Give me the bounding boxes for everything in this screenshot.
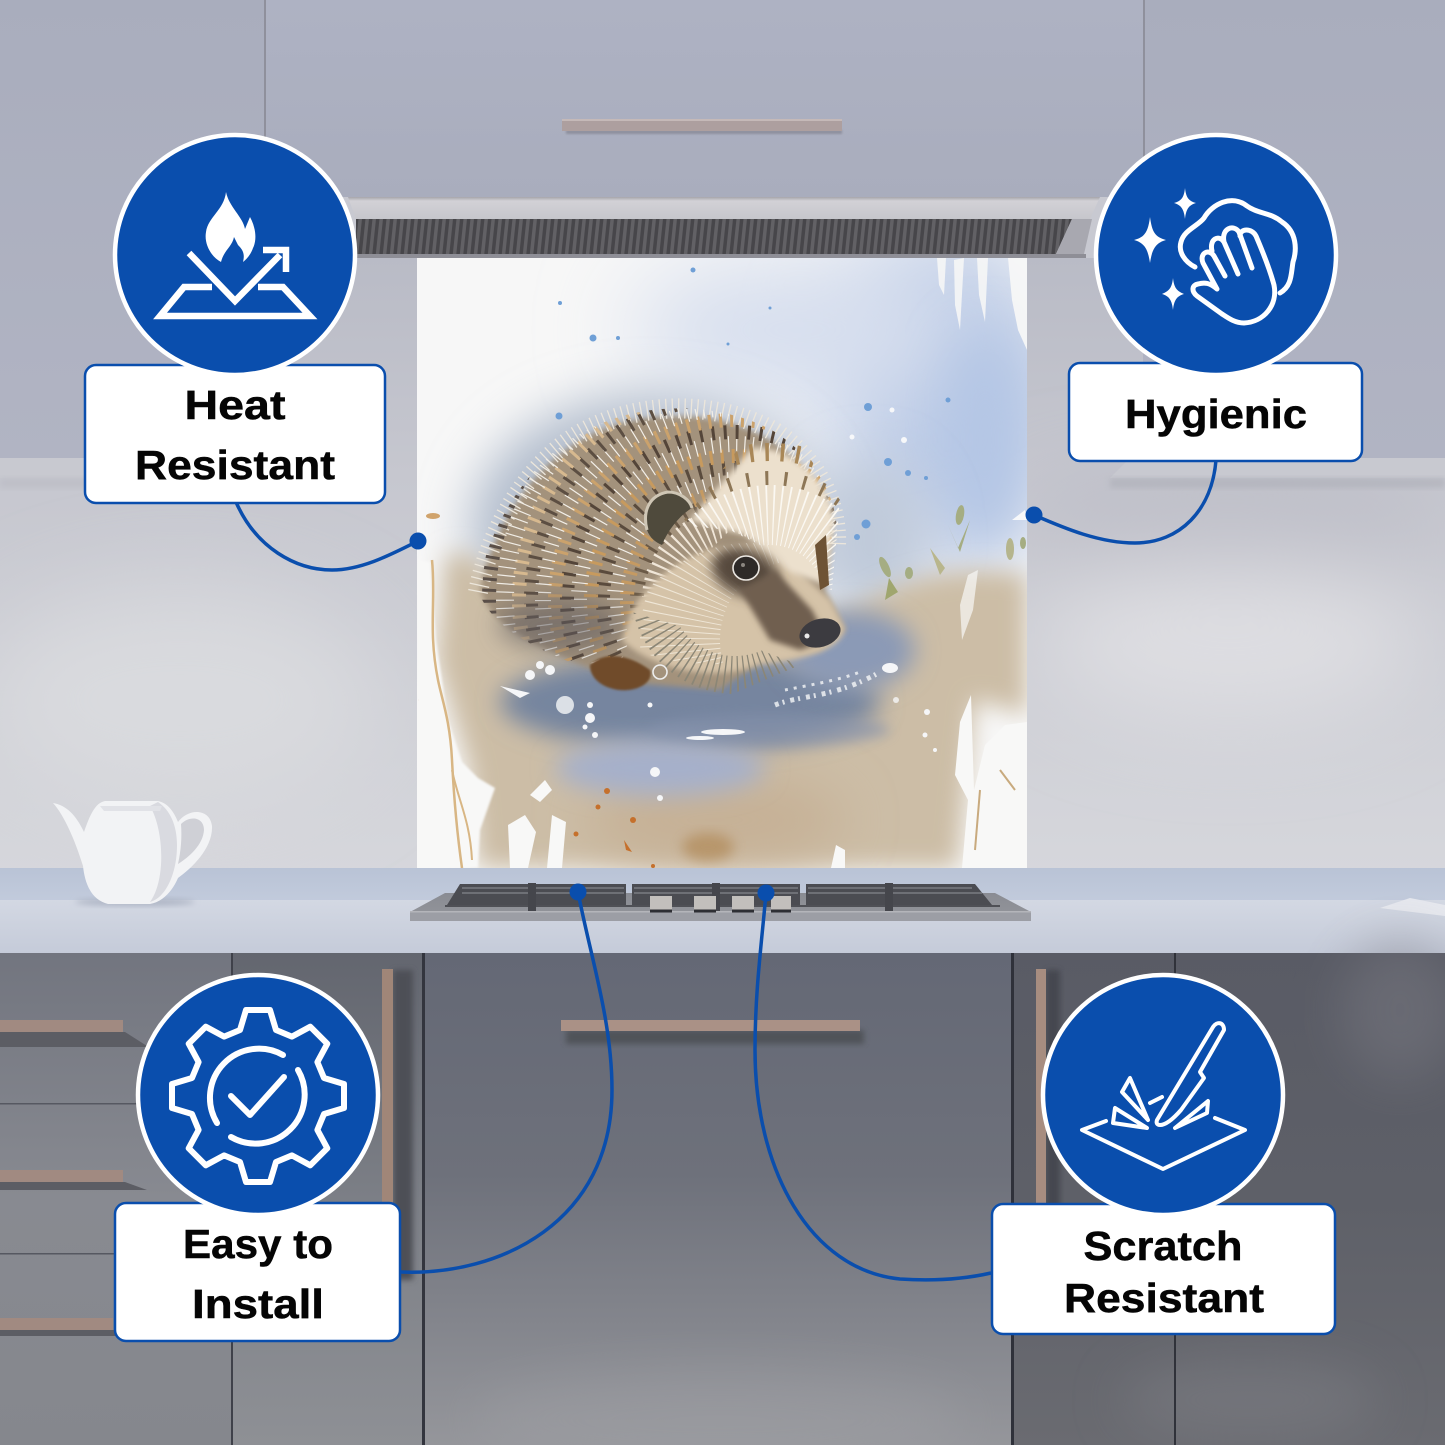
heading line 2: Resistant — [135, 442, 335, 488]
icon: knife on surface — [1082, 1023, 1245, 1169]
white splashes — [500, 661, 937, 801]
feature: hygienic — [1069, 135, 1362, 461]
heading: Hygienic — [1125, 391, 1307, 437]
white paper edges and drips — [417, 258, 1027, 868]
ears — [646, 492, 692, 545]
connector: heat resistant — [236, 502, 426, 570]
lower cabinets — [0, 940, 1445, 1445]
foot — [590, 656, 651, 690]
heading line 2: Install — [192, 1281, 324, 1327]
icon: gear with check — [172, 1010, 344, 1182]
icon badge — [138, 975, 378, 1215]
upper handle — [562, 119, 842, 134]
tan wash — [436, 553, 1027, 868]
connector: easy to install — [401, 884, 612, 1272]
green sprigs — [877, 504, 1026, 600]
dark eye mask and snout — [705, 539, 785, 605]
eye — [733, 556, 759, 580]
feature: scratch resistant — [992, 975, 1335, 1334]
heading line 2: Resistant — [1064, 1275, 1264, 1321]
feature: heat resistant — [85, 135, 385, 503]
icon: flame on reflective surface — [160, 192, 310, 316]
quill outline — [478, 408, 836, 592]
heading: Scratch — [1084, 1223, 1242, 1269]
range hood — [348, 197, 1100, 258]
countertop — [0, 868, 1445, 953]
cabinet handles — [0, 969, 1060, 1336]
ochre dribbles — [432, 560, 1015, 868]
icon: hand wiping with sparkles — [1134, 188, 1295, 323]
icon badge — [1096, 135, 1336, 375]
label box — [992, 1204, 1335, 1334]
label box — [115, 1203, 400, 1341]
face fur — [640, 543, 779, 664]
head and forehead — [622, 543, 845, 673]
blue droplets — [556, 268, 950, 540]
quills — [482, 408, 837, 664]
teapot — [53, 801, 212, 906]
upper cabinets — [0, 0, 1445, 488]
label box — [85, 365, 385, 503]
white and orange specks — [418, 408, 1027, 868]
icon badge — [1043, 975, 1283, 1215]
connector: hygienic — [1026, 460, 1216, 543]
wall — [0, 258, 1445, 878]
blue water wash — [500, 610, 915, 796]
body — [480, 416, 845, 690]
nose — [800, 618, 841, 648]
label box — [1069, 363, 1362, 461]
blue wash — [444, 258, 1027, 610]
connector: scratch resistant — [755, 884, 991, 1280]
icon badge — [115, 135, 355, 375]
heading: Heat — [184, 382, 286, 428]
hedgehog — [468, 398, 848, 694]
feature: easy to install — [115, 975, 400, 1341]
panel: hedgehog splashback artwork — [417, 258, 1027, 868]
heading: Easy to — [183, 1221, 333, 1267]
cooktop — [410, 883, 1031, 921]
